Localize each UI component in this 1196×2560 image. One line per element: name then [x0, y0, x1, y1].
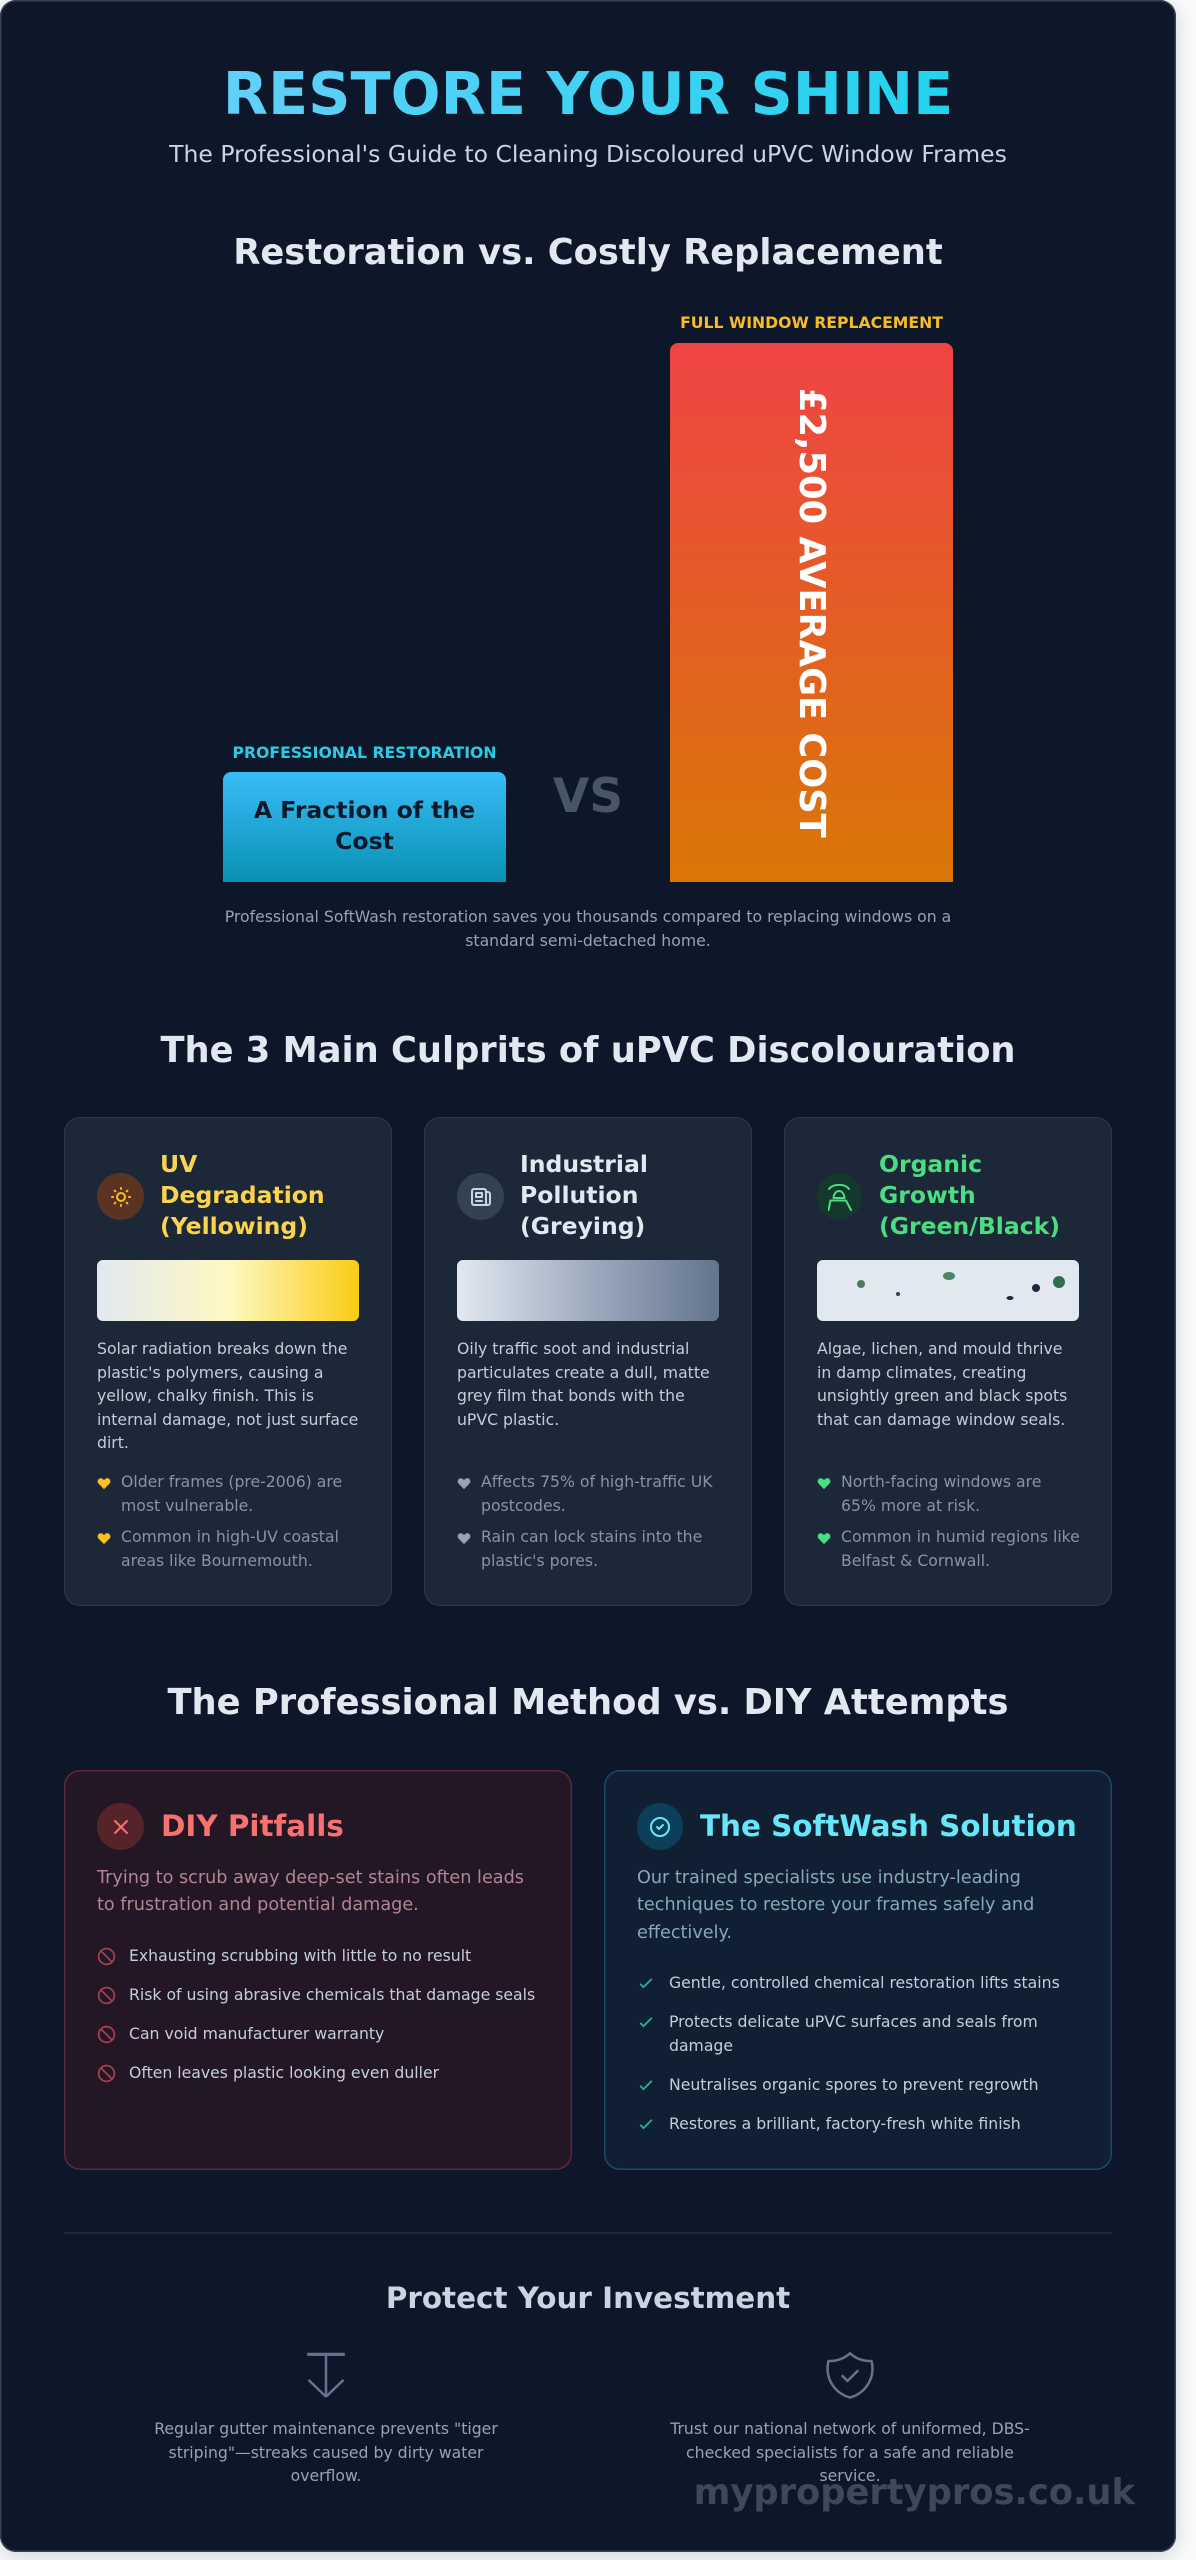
icon: ban — [98, 1986, 116, 2004]
gutter maintenance text: Regular gutter maintenance prevents "tiger — [154, 2419, 498, 2438]
icon: gutter arrow — [307, 2352, 345, 2398]
list item: Restores a brilliant, factory-fresh white finish — [669, 2114, 1021, 2133]
description: yellow, chalky finish. This is — [97, 1386, 314, 1405]
description: Solar radiation breaks down the — [97, 1339, 347, 1358]
card title: UV — [160, 1150, 197, 1178]
description: Algae, lichen, and mould thrive — [817, 1339, 1062, 1358]
list item — [669, 2012, 1038, 2055]
bullet — [121, 1527, 339, 1570]
swatch: grey gradient — [457, 1260, 719, 1321]
description: dirt. — [97, 1433, 129, 1452]
bullet: areas like Bournemouth. — [121, 1551, 313, 1570]
bullet icon — [818, 1478, 830, 1489]
intro text: to frustration and potential damage. — [97, 1895, 419, 1915]
bullet icon — [458, 1533, 470, 1544]
icon: organic growth — [817, 1173, 862, 1220]
gutter maintenance text: striping"—streaks caused by dirty water — [169, 2443, 483, 2462]
list item: Can void manufacturer warranty — [129, 2024, 384, 2043]
panel: DIY pitfalls — [64, 1770, 572, 2170]
bullet icon — [98, 1478, 110, 1489]
intro text: Our trained specialists use industry-leading — [637, 1868, 1021, 1888]
bar: full window replacement cost — [670, 343, 953, 882]
icon: sun — [97, 1173, 144, 1220]
description: plastic's polymers, causing a — [97, 1363, 323, 1382]
icon: cross — [97, 1803, 144, 1850]
vs label: VS — [553, 769, 623, 824]
intro text — [637, 1868, 1034, 1943]
bullet — [841, 1527, 1080, 1570]
description — [97, 1339, 358, 1452]
bar: full window replacement cost: £2,500 AVERAGE COST — [791, 388, 832, 837]
heading: protect your investment: Protect Your Investment — [386, 2281, 790, 2315]
bar: professional restoration cost: A Fraction of the — [254, 796, 475, 824]
list item: Protects delicate uPVC surfaces and seals from — [669, 2012, 1038, 2031]
list item: Exhausting scrubbing with little to no result — [129, 1946, 471, 1965]
caption — [225, 907, 951, 950]
panel: UV degradation — [64, 1117, 392, 1606]
card title — [520, 1150, 648, 1240]
bullet — [121, 1472, 342, 1515]
intro text: techniques to restore your frames safely and — [637, 1895, 1034, 1915]
solution list — [640, 1973, 1060, 2133]
swatch: yellowing gradient — [97, 1260, 359, 1321]
icon: ban — [98, 2064, 116, 2082]
label: professional restoration: PROFESSIONAL RESTORATION — [232, 743, 496, 762]
card title: Industrial — [520, 1150, 648, 1178]
label: full window replacement: FULL WINDOW REPLACEMENT — [680, 313, 943, 332]
description: unsightly green and black spots — [817, 1386, 1067, 1405]
icon: ban — [98, 1948, 116, 1966]
icon: check circle — [637, 1803, 683, 1850]
description: internal damage, not just surface — [97, 1410, 358, 1429]
pitfall list — [98, 1946, 535, 2082]
card title: Pollution — [520, 1181, 638, 1209]
card title: Growth — [879, 1181, 976, 1209]
specialists text — [670, 2419, 1030, 2485]
card title — [879, 1150, 1060, 1240]
bullet: Rain can lock stains into the — [481, 1527, 702, 1546]
card title — [160, 1150, 325, 1240]
heading: culprits: The 3 Main Culprits of uPVC Discolouration — [160, 1030, 1016, 1071]
card title: (Greying) — [520, 1212, 645, 1240]
card title: (Yellowing) — [160, 1212, 308, 1240]
icon: shield check — [826, 2352, 874, 2399]
bullet — [481, 1472, 713, 1515]
description: particulates create a dull, matte — [457, 1363, 710, 1382]
caption: Professional SoftWash restoration saves you thousands compared to replacing windows on a — [225, 907, 951, 926]
bullet: North-facing windows are — [841, 1472, 1041, 1491]
bullet: Affects 75% of high-traffic UK — [481, 1472, 712, 1491]
panel: organic growth — [784, 1117, 1112, 1606]
icon: check — [640, 1978, 652, 1988]
description: Oily traffic soot and industrial — [457, 1339, 689, 1358]
list item: Gentle, controlled chemical restoration lifts stains — [669, 1973, 1060, 1992]
specialists text: Trust our national network of uniformed, DBS- — [670, 2419, 1030, 2438]
panel: industrial pollution — [424, 1117, 752, 1606]
bullet icon — [818, 1533, 830, 1544]
title: RESTORE YOUR SHINE — [223, 59, 953, 128]
specialists text: checked specialists for a safe and reliable — [686, 2443, 1014, 2462]
swatch: spots on white — [817, 1260, 1079, 1321]
intro text: Trying to scrub away deep-set stains often leads — [97, 1868, 524, 1888]
description: in damp climates, creating — [817, 1363, 1026, 1382]
watermark: mypropertypros.co.uk — [694, 2472, 1135, 2513]
description — [457, 1339, 710, 1429]
specialists text: service. — [819, 2466, 881, 2485]
list item: Risk of using abrasive chemicals that damage seals — [129, 1985, 535, 2004]
gutter maintenance text: overflow. — [291, 2466, 361, 2485]
gutter maintenance text — [154, 2419, 498, 2485]
description: grey film that bonds with the — [457, 1386, 685, 1405]
intro text — [96, 1868, 524, 1915]
list item: Neutralises organic spores to prevent regrowth — [669, 2075, 1039, 2094]
panel title: The SoftWash Solution — [700, 1809, 1077, 1843]
bullet: Belfast & Cornwall. — [841, 1551, 990, 1570]
subtitle: The Professional's Guide to Cleaning Discoloured uPVC Window Frames — [169, 140, 1007, 168]
bar: professional restoration cost — [223, 772, 506, 882]
description — [817, 1339, 1067, 1429]
description: that can damage window seals. — [817, 1410, 1065, 1429]
panel title: DIY Pitfalls — [161, 1809, 344, 1843]
card title: (Green/Black) — [879, 1212, 1060, 1240]
bullet: 65% more at risk. — [841, 1496, 980, 1515]
heading: restoration vs replacement: Restoration vs. Costly Replacement — [233, 232, 943, 273]
card title: Organic — [879, 1150, 982, 1178]
icon: check — [640, 2119, 652, 2130]
bullet: Common in humid regions like — [841, 1527, 1080, 1546]
bullet: most vulnerable. — [121, 1496, 253, 1515]
caption: standard semi-detached home. — [465, 931, 711, 950]
bullet: plastic's pores. — [481, 1551, 598, 1570]
icon: ban — [98, 2026, 116, 2044]
bullet — [481, 1527, 702, 1570]
bullet: Common in high-UV coastal — [121, 1527, 339, 1546]
bar: professional restoration cost: Cost — [335, 827, 394, 855]
icon: check — [640, 2017, 652, 2028]
bullet icon — [98, 1533, 110, 1544]
description: uPVC plastic. — [457, 1410, 559, 1429]
heading: method vs DIY: The Professional Method vs. DIY Attempts — [167, 1682, 1008, 1723]
bullet — [841, 1472, 1041, 1515]
panel: SoftWash solution — [604, 1770, 1112, 2170]
bullet icon — [458, 1478, 470, 1489]
list item: damage — [669, 2036, 733, 2055]
card title: Degradation — [160, 1181, 325, 1209]
icon: newspaper — [457, 1173, 504, 1220]
bullet: postcodes. — [481, 1496, 566, 1515]
intro text: effectively. — [637, 1923, 732, 1943]
icon: check — [640, 2080, 652, 2090]
list item: Often leaves plastic looking even duller — [129, 2063, 439, 2082]
bullet: Older frames (pre-2006) are — [121, 1472, 342, 1491]
